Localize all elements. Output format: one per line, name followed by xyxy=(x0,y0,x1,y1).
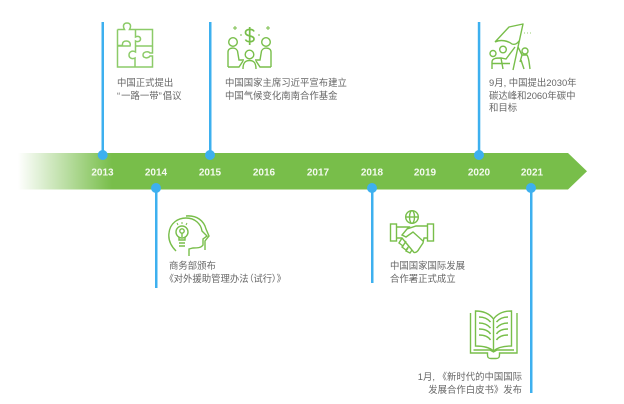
icon: open book xyxy=(470,311,517,358)
marker: 2018 xyxy=(367,183,377,283)
timeline arrow bar xyxy=(18,153,587,190)
text: 2015 event: 中国国家主席习近平宣布建立 xyxy=(225,77,347,88)
icon: puzzle xyxy=(118,23,152,67)
text: 2014 event: 商务部颁布 xyxy=(169,260,216,271)
marker: 2013 xyxy=(98,22,108,160)
year labels: 2020 xyxy=(468,168,491,178)
text: 2020 event: 9月, 中国提出2030年 xyxy=(489,77,577,88)
text: 2015 event: 中国气候变化南南合作基金 xyxy=(225,90,338,100)
icon: meeting with dollar sign xyxy=(228,26,271,69)
text: 2021 event: 1月, 《新时代的中国国际 xyxy=(418,371,522,382)
year labels xyxy=(91,168,544,178)
text: 2018 event: 中国国家国际发展 xyxy=(390,260,465,271)
text: 2021 event: 发展合作白皮书》发布 xyxy=(428,384,522,394)
text: 2015 event xyxy=(225,77,347,100)
year labels: 2021 xyxy=(521,168,544,178)
text: 2013 event xyxy=(117,77,182,100)
marker: 2014 xyxy=(151,183,161,288)
year labels: 2018 xyxy=(361,168,384,178)
text: 2018 event xyxy=(390,260,465,284)
marker: 2020 xyxy=(474,22,484,160)
year labels: 2017 xyxy=(307,168,330,178)
marker: 2021 xyxy=(526,183,536,393)
text: 2013 event: 中国正式提出 xyxy=(117,77,173,88)
year labels: 2019 xyxy=(414,168,437,178)
icon: head with light bulb xyxy=(169,216,209,256)
text: 2021 event xyxy=(418,371,522,394)
text: 2014 event xyxy=(169,260,281,284)
year labels: 2016 xyxy=(253,168,276,178)
icon: handshake with globe xyxy=(390,211,434,253)
text: 2020 event xyxy=(489,77,577,113)
icon: people raising flag xyxy=(490,24,531,70)
year labels: 2013 xyxy=(91,168,114,178)
text: 2018 event: 合作署正式成立 xyxy=(390,272,456,284)
text: 2014 event: 《对外援助管理办法（试行）》 xyxy=(169,272,281,284)
text: 2020 event: 和目标 xyxy=(489,102,517,113)
text: 2020 event: 碳达峰和2060年碳中 xyxy=(489,90,575,100)
year labels: 2015 xyxy=(199,168,222,178)
marker: 2015 xyxy=(205,22,215,160)
year labels: 2014 xyxy=(145,168,168,178)
text: 2013 event: “一路一带”倡议 xyxy=(117,90,182,100)
